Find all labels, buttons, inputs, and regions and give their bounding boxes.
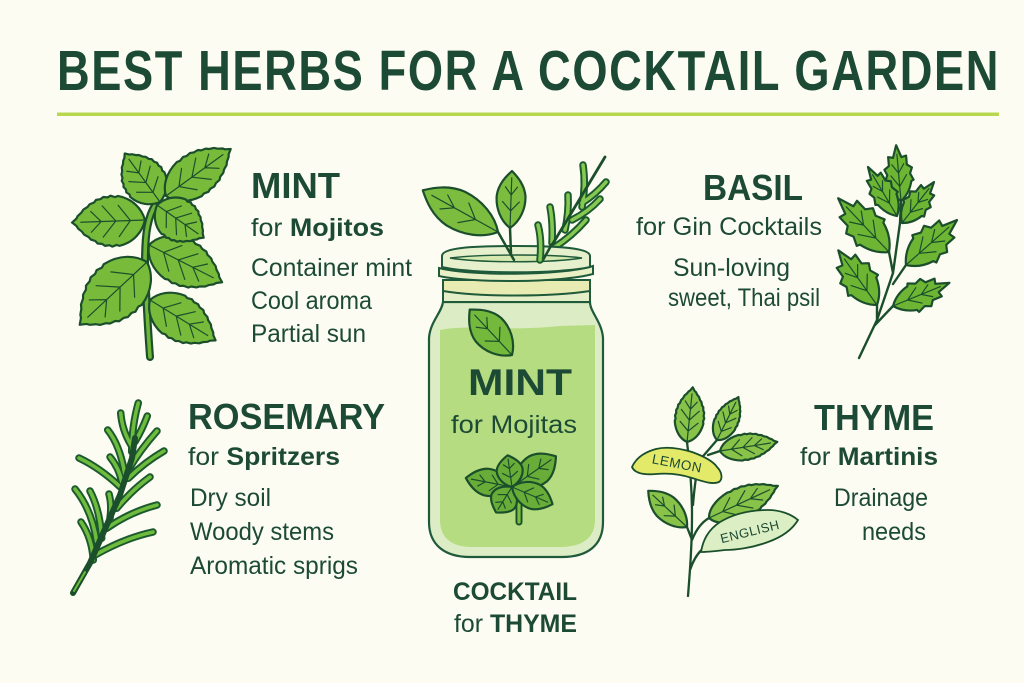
text block: rosemary: Woody stems <box>190 518 334 546</box>
tag: english: ENGLISH <box>719 517 781 546</box>
icon: herbs in jar top <box>413 157 606 260</box>
jar label: for Mojitas <box>451 411 577 439</box>
text block: thyme <box>800 397 938 546</box>
icon: floating leaf in jar <box>457 298 525 367</box>
text block: mint: Container mint <box>251 254 412 282</box>
text block: basil <box>636 167 822 312</box>
tag: lemon: LEMON <box>651 451 703 476</box>
icon: rosemary sprig <box>73 403 164 593</box>
text block: thyme: for Martinis <box>800 443 938 471</box>
text block: mint: MINT <box>251 165 340 206</box>
jar label <box>451 362 577 439</box>
text block: mint: for Mojitos <box>251 214 384 242</box>
tag: lemon <box>632 448 721 483</box>
icon: mint sprig <box>60 132 243 360</box>
text block: mint: Partial sun <box>251 320 366 348</box>
text block: rosemary: ROSEMARY <box>188 396 385 437</box>
caption: cocktail for thyme: COCKTAIL <box>453 578 577 606</box>
text block: basil: Sun-loving <box>673 254 790 282</box>
text block: rosemary: for Spritzers <box>188 443 340 471</box>
text block: basil: for Gin Cocktails <box>636 213 822 241</box>
text block: thyme: THYME <box>814 397 934 438</box>
mason jar <box>429 246 603 557</box>
text block: thyme: needs <box>862 518 926 546</box>
text block: basil: BASIL <box>703 167 803 208</box>
icon: basil sprig <box>823 144 969 358</box>
text block: mint <box>251 165 412 348</box>
stems entering jar <box>498 225 552 260</box>
text block: basil: sweet, Thai psil <box>668 284 820 312</box>
text block: thyme: Drainage <box>834 484 928 512</box>
text block: mint: Cool aroma <box>251 287 372 315</box>
caption: cocktail for thyme: for THYME <box>454 610 577 638</box>
icon: thyme sprig with tags <box>632 386 798 596</box>
caption: cocktail for thyme <box>453 578 577 638</box>
text block: rosemary: Dry soil <box>190 484 271 512</box>
text block: rosemary <box>188 396 385 580</box>
icon: mint cluster in jar <box>463 444 565 522</box>
tag: english <box>701 510 798 552</box>
jar label: MINT <box>468 362 572 403</box>
text block: rosemary: Aromatic sprigs <box>190 552 358 580</box>
